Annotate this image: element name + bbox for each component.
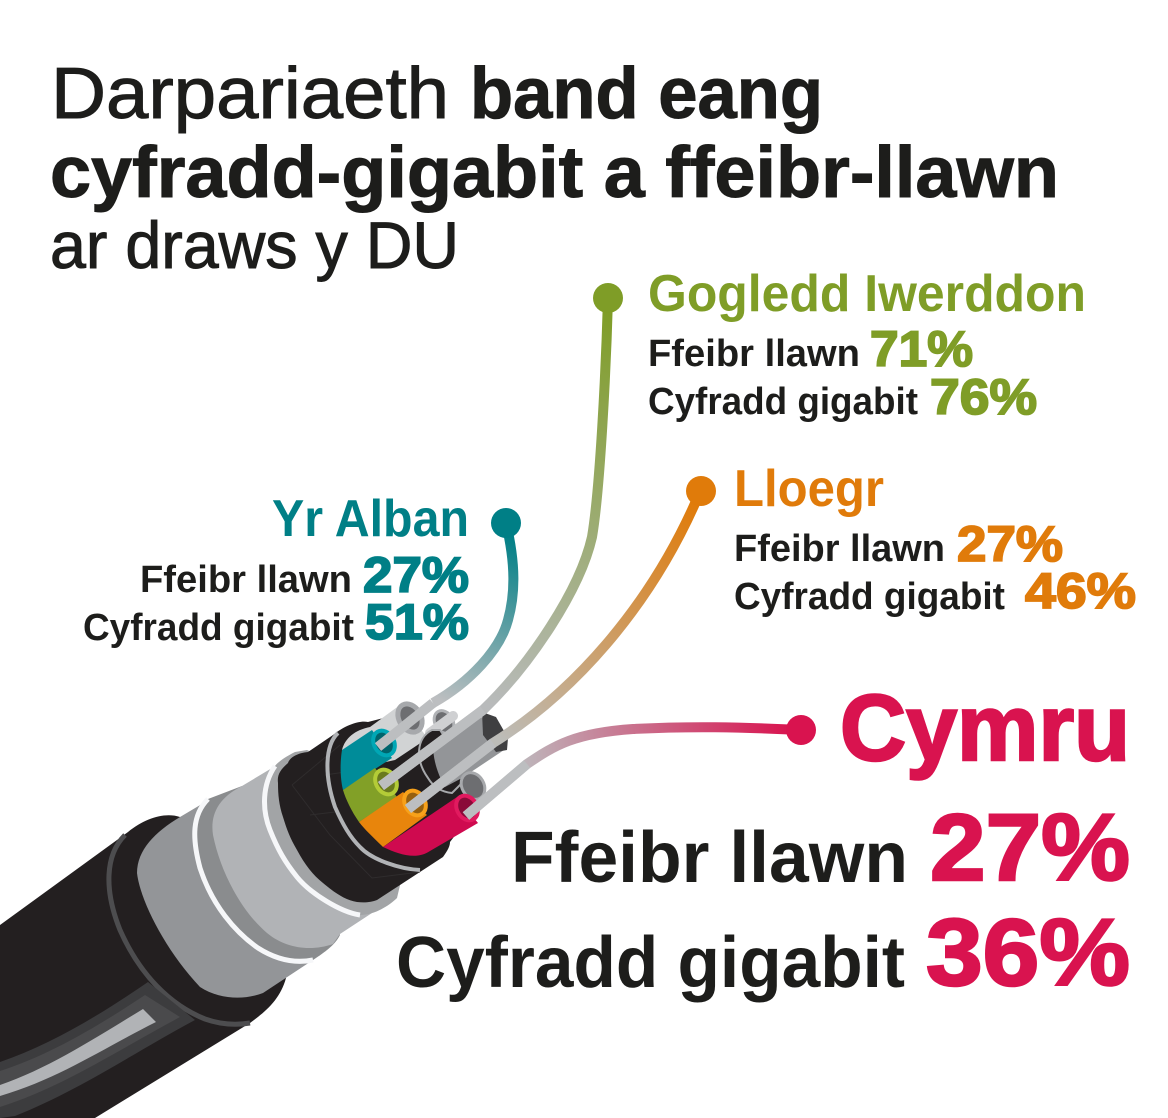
label: Cymru: 27% [930, 795, 1130, 901]
fibre: Gogledd Iwerddon [381, 283, 623, 786]
label: Lloegr: Cyfradd gigabit [734, 576, 1005, 618]
label: Yr Alban: Cyfradd gigabit [83, 607, 354, 649]
fibre: Cymru [466, 715, 816, 816]
label: Gogledd Iwerddon: 71% [870, 321, 973, 377]
title: band eang [470, 54, 823, 134]
label: Yr Alban: 27% [363, 547, 469, 603]
label: Gogledd Iwerddon: Gogledd Iwerddon [648, 265, 1086, 323]
label: Cymru [396, 675, 1130, 1006]
fibre: Yr Alban [378, 508, 521, 747]
light top tube [342, 705, 428, 770]
tube: green [343, 766, 401, 822]
tube: teal [341, 727, 399, 790]
white ring 2 [265, 766, 360, 915]
label: Cymru: Ffeibr llawn [511, 818, 908, 898]
label: Gogledd Iwerddon [648, 265, 1086, 425]
gray rear tube [419, 730, 470, 793]
label: Yr Alban: 51% [365, 594, 469, 650]
label: Lloegr: 27% [957, 516, 1063, 572]
label: Gogledd Iwerddon: Ffeibr llawn [648, 333, 860, 375]
label: Yr Alban: Ffeibr llawn [140, 559, 352, 601]
tube: red [383, 792, 482, 856]
outer black sheath [0, 815, 286, 1118]
illustration: fibre optic cable [0, 700, 508, 1118]
inner gray ring [327, 733, 420, 870]
label: Yr Alban: Yr Alban [272, 490, 469, 548]
title: Darpariaeth [51, 54, 449, 134]
title [50, 54, 1059, 282]
label: Cymru: Cyfradd gigabit [396, 923, 905, 1003]
label: Lloegr: 46% [1025, 563, 1136, 619]
white ring [195, 799, 313, 961]
label: Lloegr [734, 460, 1136, 619]
light section [212, 765, 372, 948]
label: Cymru: 36% [926, 900, 1130, 1006]
gray armour section [137, 798, 313, 998]
dark band [195, 786, 340, 961]
stub fibre [430, 716, 453, 733]
faint face detail [292, 745, 420, 878]
sheath stripe [0, 982, 195, 1118]
title: cyfradd-gigabit a ffeibr-llawn [50, 133, 1059, 213]
gray ring [265, 750, 420, 915]
black face [278, 715, 478, 902]
label: Lloegr: Ffeibr llawn [734, 528, 945, 570]
label: Lloegr: Lloegr [734, 460, 884, 518]
title: ar draws y DU [50, 208, 459, 282]
label: Yr Alban [83, 490, 469, 650]
label: Gogledd Iwerddon: 76% [930, 369, 1037, 425]
fibre: Lloegr [408, 476, 716, 809]
sheath rim band [109, 835, 250, 1024]
label: Cymru: Cymru [840, 675, 1130, 780]
tube: orange [359, 787, 430, 847]
label: Gogledd Iwerddon: Cyfradd gigabit [648, 381, 918, 423]
